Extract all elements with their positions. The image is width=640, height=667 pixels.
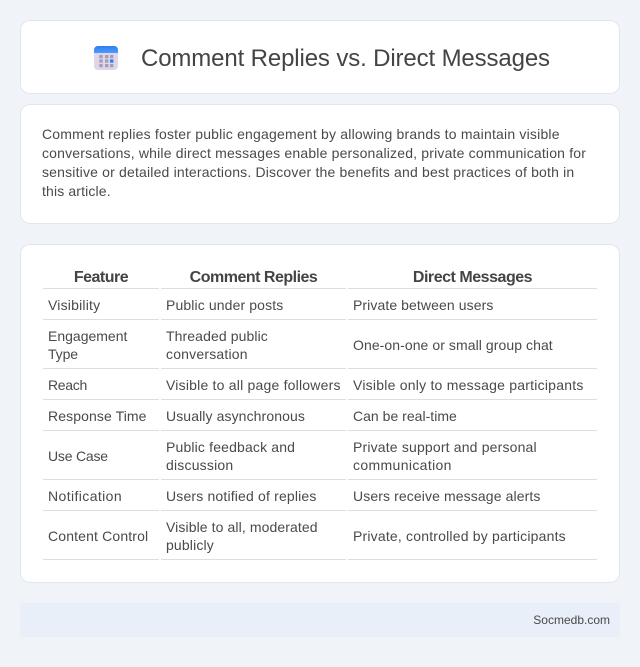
row: Notification: Users notified of replies [166,488,317,504]
row: Use Case: Use Case [48,448,108,464]
row: Notification: Users receive message alerts [353,488,540,504]
row: Notification [48,488,540,504]
header: Feature: Feature [74,269,128,286]
row: Use Case: Private support and personal [353,439,537,455]
header: Direct Messages: Direct Messages [413,269,532,286]
footer bar [20,603,620,637]
row: Content Control: Visible to all, moderated [166,519,318,535]
panel: intro text [20,104,620,224]
row: Use Case: communication [353,457,452,473]
intro line 4: this article. [42,183,111,199]
row: Engagement Type: One-on-one or small group chat [353,337,553,353]
row: Engagement Type: Engagement [48,328,127,344]
intro line 1: Comment replies foster public engagement by allowing brands to maintain visible [42,126,560,142]
row: Visibility: Visibility [48,297,100,313]
row: Engagement Type: Threaded public [166,328,268,344]
row: Reach: Visible to all page followers [166,377,341,393]
row: Visibility [48,297,493,313]
row: Content Control: Content Control [48,528,148,544]
row: Use Case: discussion [166,457,233,473]
row: Engagement Type: conversation [166,346,248,362]
row: Engagement Type: Type [48,346,78,362]
icon: calendar [94,46,118,70]
row: Content Control: publicly [166,537,214,553]
title: Comment Replies vs. Direct Messages [141,45,550,72]
row: Reach [48,377,584,393]
footer credit: Socmedb.com [533,613,610,627]
row: Response Time: Can be real-time [353,408,457,424]
row: Reach: Reach [48,377,87,393]
row: Engagement Type [48,328,553,362]
row: Notification: Notification [48,488,122,504]
panel: header [20,20,620,94]
row: Use Case: Public feedback and [166,439,295,455]
row: Visibility: Private between users [353,297,493,313]
intro line 3: sensitive or detailed interactions. Discover the benefits and best practices of both in [42,164,574,180]
intro line 2: conversations, while direct messages enable personalized, private communication for [42,145,586,161]
row: Response Time: Usually asynchronous [166,408,305,424]
row: Content Control: Private, controlled by participants [353,528,566,544]
row: Response Time [48,408,457,424]
row: Use Case [48,439,537,473]
row: Content Control [48,519,566,553]
row: Reach: Visible only to message participants [353,377,584,393]
row: Response Time: Response Time [48,408,147,424]
row: Visibility: Public under posts [166,297,283,313]
header: Comment Replies: Comment Replies [190,269,317,286]
panel: comparison table [20,244,620,583]
